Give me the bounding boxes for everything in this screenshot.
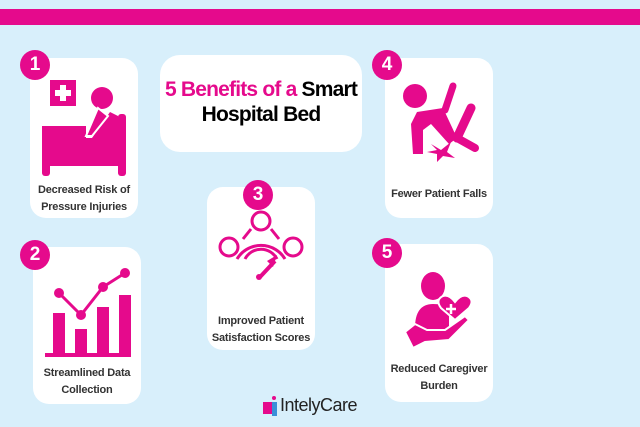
badge 4 <box>372 50 402 80</box>
text <box>44 367 131 396</box>
text: Burden <box>420 380 458 392</box>
icon: falling person <box>403 82 479 162</box>
badge 5: 5 <box>382 242 392 263</box>
badge 3 <box>243 180 273 210</box>
badge 4: 4 <box>382 54 392 75</box>
panel: 5 caregiver <box>385 244 493 402</box>
title: 5 Benefits of a Smart <box>165 78 357 101</box>
badge 1 <box>20 50 50 80</box>
badge 3: 3 <box>253 184 263 205</box>
text: Collection <box>61 384 113 396</box>
text: Reduced Caregiver <box>391 363 487 375</box>
icon: hand heart person <box>406 272 471 347</box>
text: Improved Patient <box>218 315 304 327</box>
icon: satisfaction gauge <box>218 210 304 280</box>
badge 1: 1 <box>30 54 40 75</box>
text: Satisfaction Scores <box>212 332 310 344</box>
title: Hospital Bed <box>202 103 320 126</box>
icon: hospital bed <box>42 80 126 176</box>
text: Decreased Risk of <box>38 184 130 196</box>
text: Streamlined Data <box>44 367 130 379</box>
text <box>212 315 310 344</box>
title <box>165 78 358 126</box>
panel: 4 falls <box>385 58 493 218</box>
text: Pressure Injuries <box>41 201 127 213</box>
panel: 3 satisfaction <box>207 187 315 350</box>
text <box>38 184 130 213</box>
icon: chart <box>45 268 131 357</box>
top bar <box>0 9 640 25</box>
text: Fewer Patient Falls <box>391 188 487 200</box>
badge 2 <box>20 240 50 270</box>
badge 2: 2 <box>30 244 40 265</box>
logo: IntelyCare <box>280 395 357 415</box>
panel: 1 pressure injuries <box>30 58 138 218</box>
icon: logo mark <box>263 396 277 416</box>
text <box>391 363 488 392</box>
badge 5 <box>372 238 402 268</box>
title card <box>160 55 362 152</box>
panel: 2 data <box>33 247 141 404</box>
